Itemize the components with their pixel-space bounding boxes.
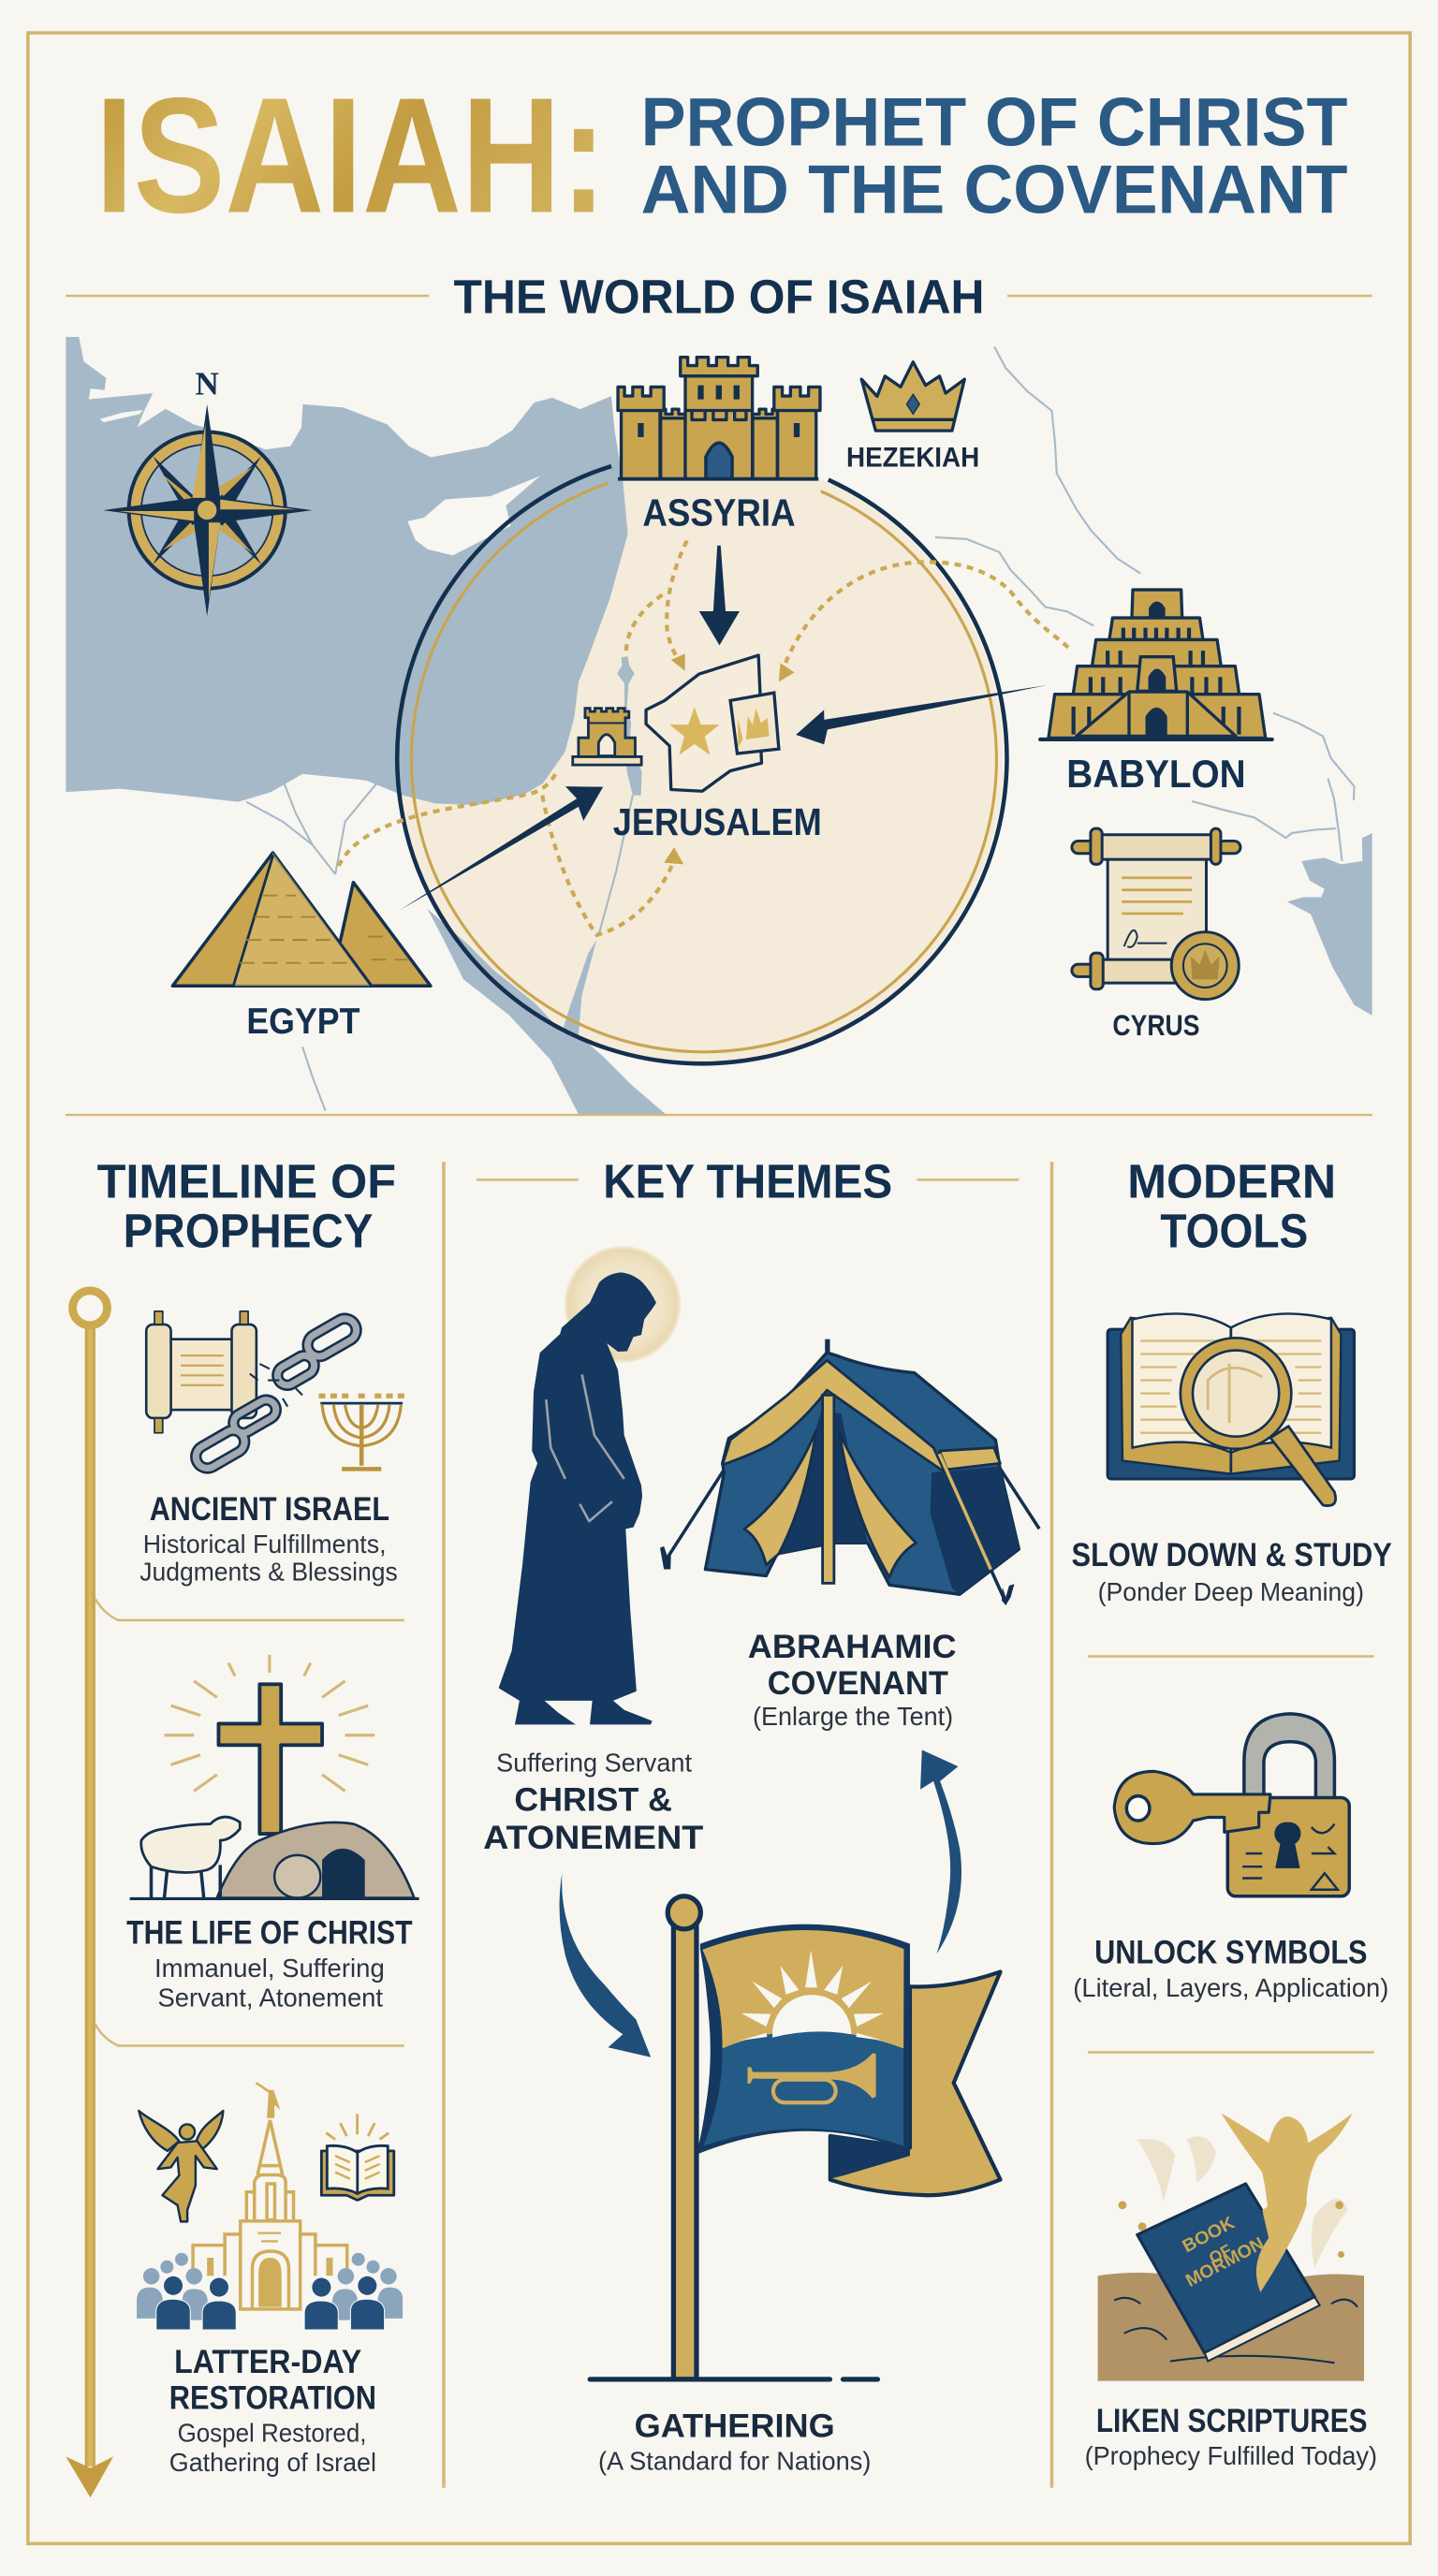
- text: ancient Israel: [139, 1491, 398, 1587]
- label: Jerusalem: JERUSALEM: [613, 800, 822, 843]
- icon: gathering banner: [590, 1896, 1001, 2379]
- Jerusalem territory: [646, 655, 779, 791]
- icon: cross with rays, lamb and tomb: [130, 1655, 419, 1898]
- outer and inner rings: [411, 483, 996, 1052]
- text: the life of Christ: Immanuel, Suffering: [154, 1954, 385, 1983]
- text: slow down and study: (Ponder Deep Meaning): [1098, 1577, 1364, 1606]
- heading: modern tools: [1127, 1155, 1336, 1257]
- icon: broken chain: [192, 1314, 360, 1472]
- text: Christ and atonement: CHRIST &: [514, 1781, 672, 1818]
- icon: gathered people: [137, 2253, 403, 2330]
- text: unlock symbols: [1073, 1935, 1388, 2002]
- icon: Book of Mormon emerging from the earth: OF: [1206, 2240, 1235, 2268]
- arrow: Assyria to Jerusalem: [699, 546, 740, 645]
- icon: Assyria castle: [618, 358, 820, 479]
- label: Babylon: BABYLON: [1066, 752, 1246, 796]
- Cyprus island: [407, 476, 540, 555]
- label: Egypt: EGYPT: [246, 1002, 360, 1042]
- icon: Book of Mormon emerging from the earth: MORMON: [1182, 2234, 1268, 2291]
- panel: key themes: [477, 1155, 1039, 2475]
- label: Assyria: ASSYRIA: [642, 491, 796, 534]
- heading: timeline of prophecy: PROPHECY: [124, 1204, 374, 1257]
- text: ancient Israel: Judgments & Blessings: [139, 1558, 398, 1587]
- heading: timeline of prophecy: TIMELINE OF: [97, 1155, 396, 1208]
- title: [95, 64, 1347, 247]
- text: Abrahamic covenant: ABRAHAMIC: [748, 1629, 957, 1665]
- icon: scroll: [146, 1311, 257, 1433]
- icon: Cyrus scroll with seal: [1072, 828, 1240, 1000]
- text: unlock symbols: UNLOCK SYMBOLS: [1094, 1935, 1368, 1971]
- text: Christ and atonement: Suffering Servant: [496, 1748, 692, 1777]
- text: latter-day restoration: LATTER-DAY: [174, 2344, 361, 2380]
- Sea of Galilee, Jordan river and Dead Sea: [617, 657, 641, 796]
- title: ISAIAH:: [95, 64, 607, 247]
- icon: Book of Mormon emerging from the earth: [1098, 2113, 1364, 2381]
- timeline arrow: [66, 1291, 404, 2497]
- text: the life of Christ: Servant, Atonement: [158, 1983, 383, 2012]
- text: Christ and atonement: [483, 1748, 704, 1856]
- text: Abrahamic covenant: (Enlarge the Tent): [753, 1702, 953, 1731]
- text: liken scriptures: [1085, 2403, 1377, 2470]
- section heading: the world of Isaiah: THE WORLD OF ISAIAH: [453, 270, 985, 323]
- label: Hezekiah: HEZEKIAH: [846, 443, 979, 474]
- Mediterranean sea: [66, 337, 628, 805]
- arrow: gathering to covenant: [920, 1750, 961, 1954]
- heading: modern tools: TOOLS: [1160, 1204, 1308, 1257]
- text: Abrahamic covenant: COVENANT: [768, 1665, 948, 1702]
- icon: Babylon ziggurat: [1040, 590, 1272, 739]
- icon: compass rose: [103, 365, 313, 616]
- text: slow down and study: SLOW DOWN & STUDY: [1072, 1537, 1392, 1573]
- text: liken scriptures: (Prophecy Fulfilled Today): [1085, 2441, 1377, 2470]
- icon: angel: [139, 2111, 223, 2221]
- dotted routes: [339, 541, 1068, 935]
- text: the life of Christ: [126, 1915, 413, 2012]
- text: the life of Christ: THE LIFE OF CHRIST: [126, 1915, 413, 1952]
- icon: halo: [565, 1246, 681, 1363]
- heading: timeline of prophecy: [97, 1155, 396, 1257]
- panel: modern tools: [1072, 1155, 1392, 2470]
- icon: open book with magnifying glass: [1108, 1313, 1354, 1506]
- text: latter-day restoration: Gathering of Israel: [169, 2448, 376, 2477]
- text: gathering: [598, 2408, 871, 2475]
- icon: key and padlock: [1114, 1714, 1349, 1896]
- text: latter-day restoration: [169, 2344, 376, 2477]
- icon: open book with rays: [321, 2114, 394, 2201]
- title: AND THE COVENANT: [641, 150, 1347, 227]
- label: Cyrus: CYRUS: [1112, 1008, 1199, 1042]
- text: ancient Israel: Historical Fulfillments,: [143, 1530, 387, 1559]
- icon: menorah: [320, 1394, 403, 1469]
- Red Sea: [427, 909, 666, 1114]
- text: slow down and study: [1072, 1537, 1392, 1606]
- text: latter-day restoration: Gospel Restored,: [178, 2419, 366, 2448]
- icon: covenant tent: [660, 1340, 1039, 1605]
- text: gathering: GATHERING: [635, 2408, 835, 2444]
- heading: key themes: KEY THEMES: [603, 1155, 892, 1208]
- Jerusalem region circle fill: [399, 454, 1004, 1062]
- panel: timeline of prophecy: [66, 1155, 419, 2497]
- column divider right: [1050, 1162, 1052, 2488]
- divider under map: [66, 1114, 1372, 1116]
- text: latter-day restoration: RESTORATION: [169, 2379, 376, 2416]
- column divider left: [443, 1162, 445, 2488]
- icon: Hezekiah crown: [861, 362, 964, 431]
- text: Abrahamic covenant: [748, 1629, 957, 1731]
- text: Christ and atonement: ATONEMENT: [483, 1820, 704, 1856]
- arrow: Christ to gathering: [560, 1873, 651, 2057]
- arrow: Egypt to Jerusalem: [400, 786, 603, 911]
- icon: temple: [193, 2083, 347, 2309]
- panel: map of the ancient Near East: [66, 337, 1372, 1114]
- icon: compass rose: N: [196, 365, 219, 402]
- title: PROPHET OF CHRIST: [641, 82, 1347, 160]
- text: gathering: (A Standard for Nations): [598, 2446, 871, 2475]
- small island sliver: [100, 410, 143, 422]
- icon: Egypt pyramids: [172, 853, 431, 986]
- text: unlock symbols: (Literal, Layers, Application): [1073, 1973, 1388, 2002]
- text: liken scriptures: LIKEN SCRIPTURES: [1096, 2403, 1368, 2439]
- icon: suffering servant silhouette: [499, 1272, 656, 1724]
- arrow: Babylon to Jerusalem: [796, 685, 1047, 744]
- icon: Book of Mormon emerging from the earth: BOOK: [1180, 2214, 1239, 2257]
- icon: small Jerusalem fortress: [573, 709, 641, 765]
- heading: modern tools: MODERN: [1127, 1155, 1336, 1208]
- text: ancient Israel: ANCIENT ISRAEL: [150, 1491, 389, 1528]
- Persian gulf: [1287, 833, 1372, 1016]
